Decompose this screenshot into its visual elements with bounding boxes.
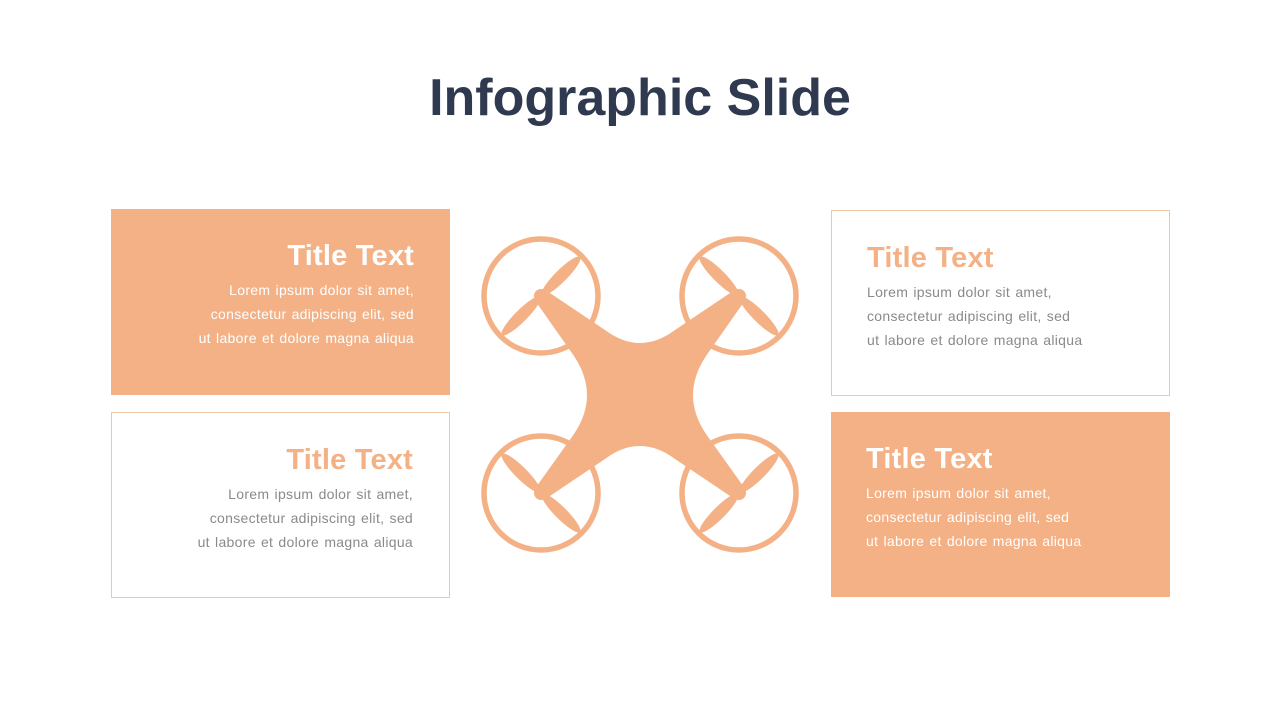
text block: consectetur adipiscing elit, sed [867,308,1070,324]
heading: Title Text [866,443,993,475]
panel: bottom right [831,412,1170,597]
text block: consectetur adipiscing elit, sed [866,509,1069,525]
text block: ut labore et dolore magna aliqua [198,534,413,550]
heading: Title Text [867,242,994,274]
text block: Lorem ipsum dolor sit amet, [228,486,413,502]
text block [199,282,414,346]
text block [867,284,1082,348]
text block [198,486,413,550]
panel: top right [831,210,1170,396]
heading: Title Text [287,240,414,272]
heading: Title Text [286,444,413,476]
text block: Lorem ipsum dolor sit amet, [229,282,414,298]
title: Infographic Slide [429,69,851,127]
text block: ut labore et dolore magna aliqua [866,533,1081,549]
text block: ut labore et dolore magna aliqua [199,330,414,346]
text block: consectetur adipiscing elit, sed [210,510,413,526]
text block: ut labore et dolore magna aliqua [867,332,1082,348]
panel: bottom left [111,412,450,598]
panel: top left [111,209,450,395]
text block: Lorem ipsum dolor sit amet, [866,485,1051,501]
text block: Lorem ipsum dolor sit amet, [867,284,1052,300]
text block: consectetur adipiscing elit, sed [211,306,414,322]
text block [866,485,1082,549]
